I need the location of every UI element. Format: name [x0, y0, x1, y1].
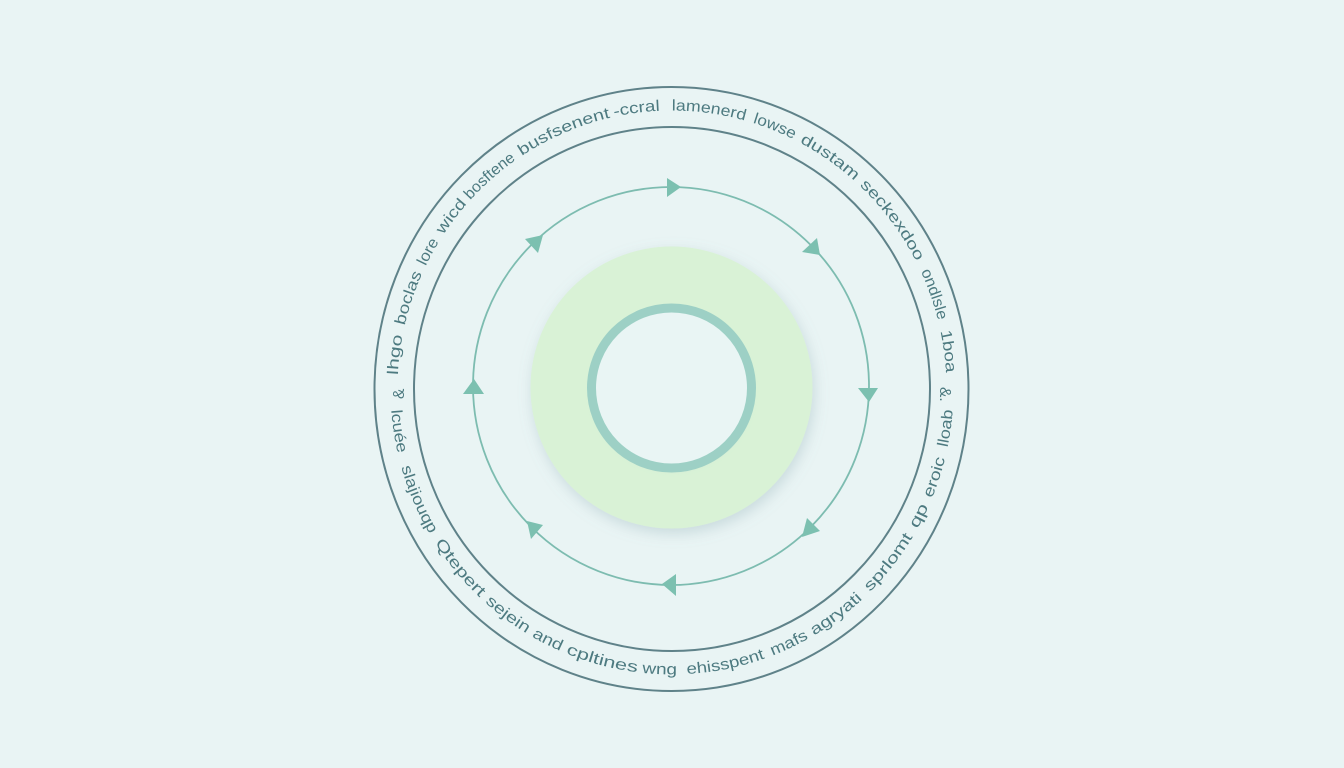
- lower curved text: agryati: [812, 592, 862, 634]
- arrow: upper left: [525, 235, 543, 253]
- outer text ring: [374, 86, 970, 692]
- upper curved text: busfsenent: [516, 108, 610, 156]
- outer ring outline: [374, 87, 968, 691]
- upper curved text: 1boa: [940, 331, 954, 373]
- teal inner ring: [592, 308, 752, 468]
- left ampersand: &: [391, 388, 408, 399]
- lower curved text: sejein: [486, 598, 529, 633]
- upper curved text: ondlsle: [922, 270, 946, 319]
- arrow: bottom: [662, 574, 676, 596]
- upper curved text: dustam: [802, 136, 858, 180]
- arrow: left: [463, 379, 484, 394]
- lower curved text: ehisspent: [687, 650, 765, 674]
- lower curved text: sprlomt: [866, 532, 913, 590]
- lower curved text: cpltines: [568, 647, 637, 672]
- central disc: [530, 246, 812, 528]
- inner ring shadow: [592, 310, 752, 470]
- upper curved text: seckexdoo: [861, 181, 922, 260]
- upper curved text: lhgo: [386, 336, 404, 374]
- lower curved text: mafs: [770, 632, 808, 656]
- lower curved text: qp: [912, 505, 928, 527]
- lower curved text: lcuée: [391, 410, 406, 452]
- lower curved text: and: [533, 630, 564, 650]
- lower curved text: slajiouqp: [402, 466, 436, 532]
- centre hole: [592, 308, 752, 468]
- lower curved text: [391, 410, 952, 678]
- upper curved text: bosftene: [462, 154, 514, 200]
- cycle ring line: [473, 187, 869, 585]
- arrow: lower right: [802, 518, 820, 537]
- arrow: right: [858, 388, 878, 402]
- lower curved text: lloab: [936, 410, 952, 446]
- upper curved text: wicd: [436, 198, 466, 232]
- right ampersand: &.: [936, 387, 953, 402]
- lower curved text: wng: [642, 664, 676, 678]
- cycle ring with arrows: [463, 178, 878, 596]
- upper curved text: lamenerd: [672, 99, 746, 120]
- arrow: upper right: [802, 238, 820, 255]
- upper curved text: [386, 99, 954, 374]
- lower curved text: eroic: [926, 457, 944, 496]
- arrow: top: [667, 178, 681, 197]
- upper curved text: lowse: [754, 112, 796, 138]
- lower curved text: Qtepert: [437, 540, 486, 598]
- upper curved text: boclas: [394, 272, 421, 324]
- upper curved text: -ccral: [614, 100, 659, 115]
- inner ring outline: [414, 127, 930, 651]
- arrow: lower left: [527, 521, 543, 539]
- green disc: [530, 246, 812, 528]
- upper curved text: lore: [416, 240, 438, 266]
